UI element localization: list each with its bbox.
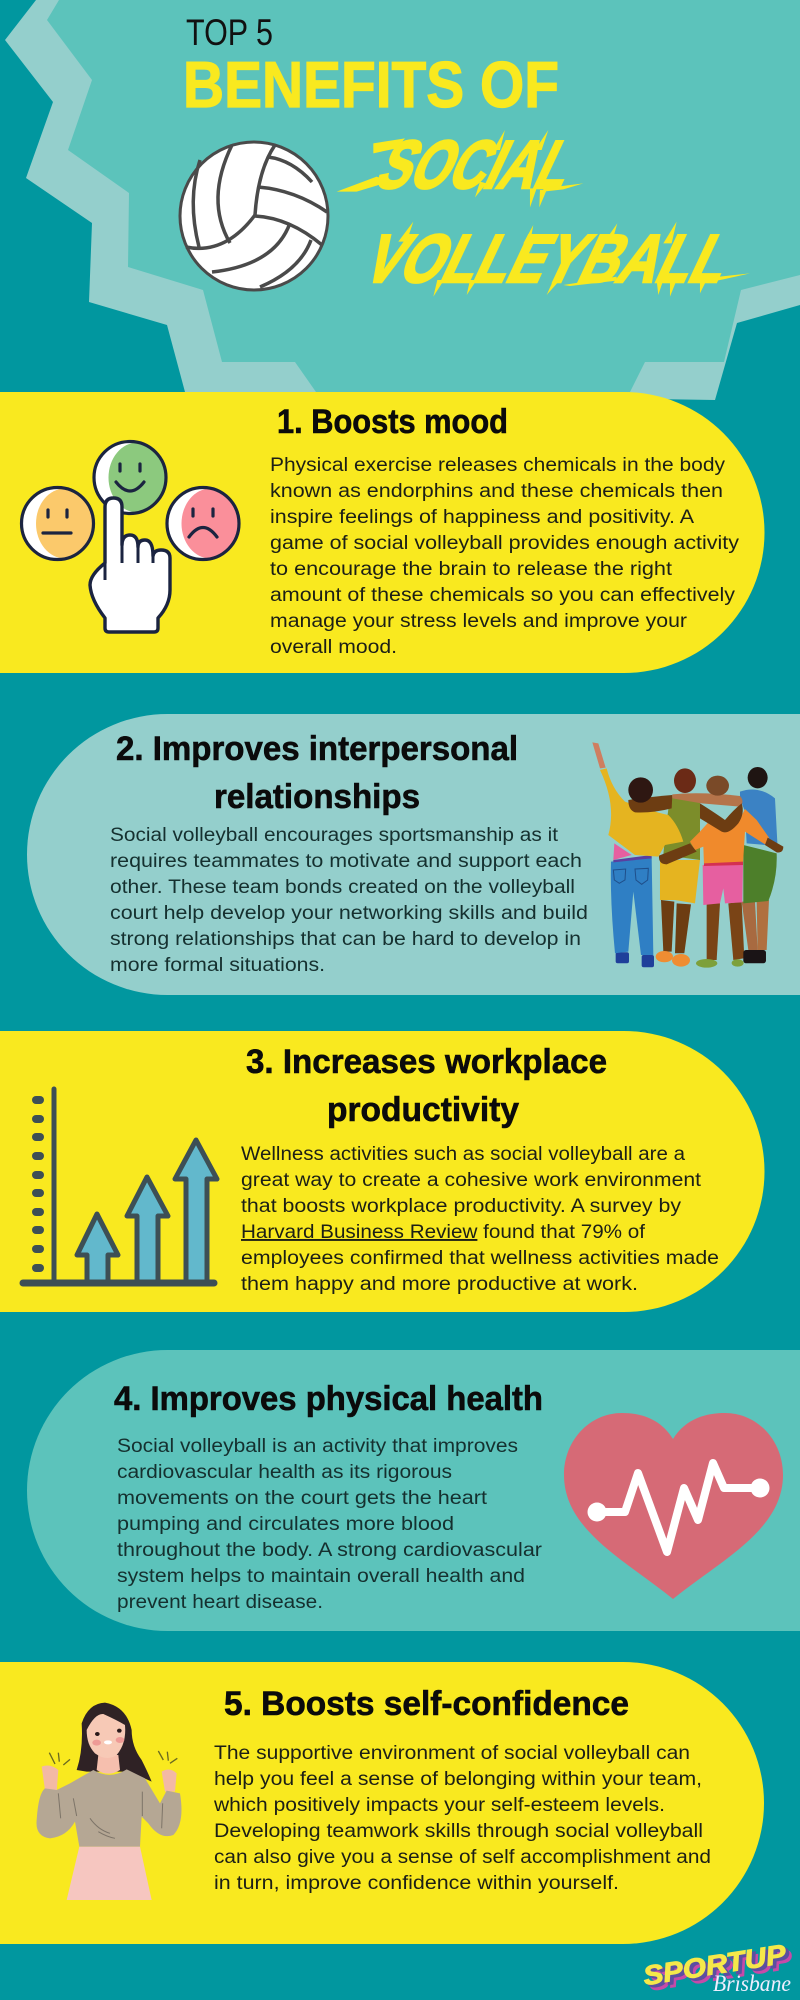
text block: physical health: system helps to maintain overall health and	[117, 1566, 525, 1587]
panel: boosts mood	[0, 392, 764, 673]
icon: mood faces and pointing hand	[22, 442, 240, 632]
icon: heart with pulse line	[564, 1413, 783, 1599]
text block: self-confidence: in turn, improve confidence within yourself.	[214, 1873, 619, 1894]
logo: sportup brisbane: SPORTUP	[645, 1941, 793, 1994]
panel: increases workplace productivity	[0, 1031, 764, 1312]
heading: improves interpersonal relationships	[116, 730, 518, 816]
title: social: SOCIAL	[366, 127, 589, 203]
title: benefits of: BENEFITS OF	[183, 48, 559, 121]
text block: boosts mood: amount of these chemicals so you can effectively	[270, 585, 736, 606]
logo: sportup brisbane: SPORTUP	[641, 1939, 789, 1991]
panel: improves interpersonal relationships	[27, 714, 800, 995]
text block: physical health: throughout the body. A strong cardiovascular	[117, 1540, 543, 1561]
text block: relationships: more formal situations.	[110, 955, 325, 976]
heading: improves physical health: 4. Improves physical health	[114, 1380, 543, 1418]
text block: boosts mood: Physical exercise releases chemicals in the body	[270, 455, 726, 476]
text block: productivity: Harvard Business Review found that 79% of	[241, 1222, 646, 1243]
panel: boosts self-confidence	[0, 1662, 764, 1944]
text block: physical health	[117, 1436, 543, 1613]
text block: boosts mood: manage your stress levels and improve your	[270, 611, 688, 632]
text block: productivity: great way to create a cohesive work environment	[241, 1170, 702, 1191]
heading: improves interpersonal relationships: relationships	[214, 778, 420, 816]
text block: relationships: court help develop your networking skills and build	[110, 903, 588, 924]
text block: boosts mood	[270, 455, 740, 658]
header backdrop shape	[5, 0, 800, 400]
text block: self-confidence	[213, 1743, 711, 1894]
logo: sportup brisbane: Brisbane	[713, 1971, 791, 1996]
icon: volleyball	[180, 142, 328, 290]
text block: physical health: movements on the court gets the heart	[117, 1488, 488, 1509]
logo: sportup brisbane: SPORTUP	[647, 1944, 795, 1996]
text block: self-confidence: which positively impacts your self-esteem levels.	[213, 1795, 665, 1816]
text block: productivity: Wellness activities such as social volleyball are a	[241, 1144, 685, 1165]
text block: boosts mood: known as endorphins and these chemicals then	[270, 481, 723, 502]
text block: physical health: Social volleyball is an activity that improves	[117, 1436, 518, 1457]
text block: physical health: prevent heart disease.	[117, 1592, 323, 1613]
text block: productivity: that boosts workplace productivity. A survey by	[241, 1196, 682, 1217]
text block: self-confidence: Developing teamwork skills through social volleyball	[214, 1821, 703, 1842]
heading: improves interpersonal relationships: 2. Improves interpersonal	[116, 730, 518, 768]
heading: increases workplace productivity: 3. Increases workplace	[246, 1043, 607, 1081]
text block: productivity: employees confirmed that wellness activities made	[241, 1248, 719, 1269]
text block: self-confidence: The supportive environment of social volleyball can	[214, 1743, 690, 1764]
text block: productivity: them happy and more productive at work.	[241, 1274, 638, 1295]
panel: improves physical health	[27, 1350, 800, 1631]
text block: productivity	[241, 1144, 719, 1295]
illustration: group of friends	[592, 742, 783, 968]
heading: boosts mood: 1. Boosts mood	[277, 403, 508, 441]
text block: relationships: other. These team bonds created on the volleyball	[110, 877, 575, 898]
text block: relationships: Social volleyball encourages sportsmanship as it	[110, 825, 559, 846]
title: top 5: TOP 5	[186, 12, 273, 53]
text block: boosts mood: overall mood.	[270, 637, 397, 658]
text block: boosts mood: to encourage the brain to release the right	[270, 559, 673, 580]
heading: increases workplace productivity	[246, 1043, 607, 1129]
illustration: confident woman	[36, 1703, 181, 1900]
text block: relationships: requires teammates to motivate and support each	[110, 851, 582, 872]
title: social	[337, 127, 589, 207]
text block: relationships: strong relationships that can be hard to develop in	[110, 929, 581, 950]
text block: relationships	[110, 825, 588, 976]
text block: boosts mood: game of social volleyball provides enough activity	[270, 533, 740, 554]
heading: boosts self-confidence: 5. Boosts self-confidence	[224, 1685, 629, 1723]
text block: self-confidence: can also give you a sense of self accomplishment and	[214, 1847, 711, 1868]
text block: boosts mood: inspire feelings of happiness and positivity. A	[270, 507, 694, 528]
heading: increases workplace productivity: productivity	[327, 1091, 519, 1129]
text block: physical health: pumping and circulates more blood	[117, 1514, 454, 1535]
text block: physical health: cardiovascular health as its rigorous	[117, 1462, 452, 1483]
icon: rising bar chart arrows	[23, 1089, 217, 1283]
text block: self-confidence: help you feel a sense of belonging within your team,	[214, 1769, 702, 1790]
